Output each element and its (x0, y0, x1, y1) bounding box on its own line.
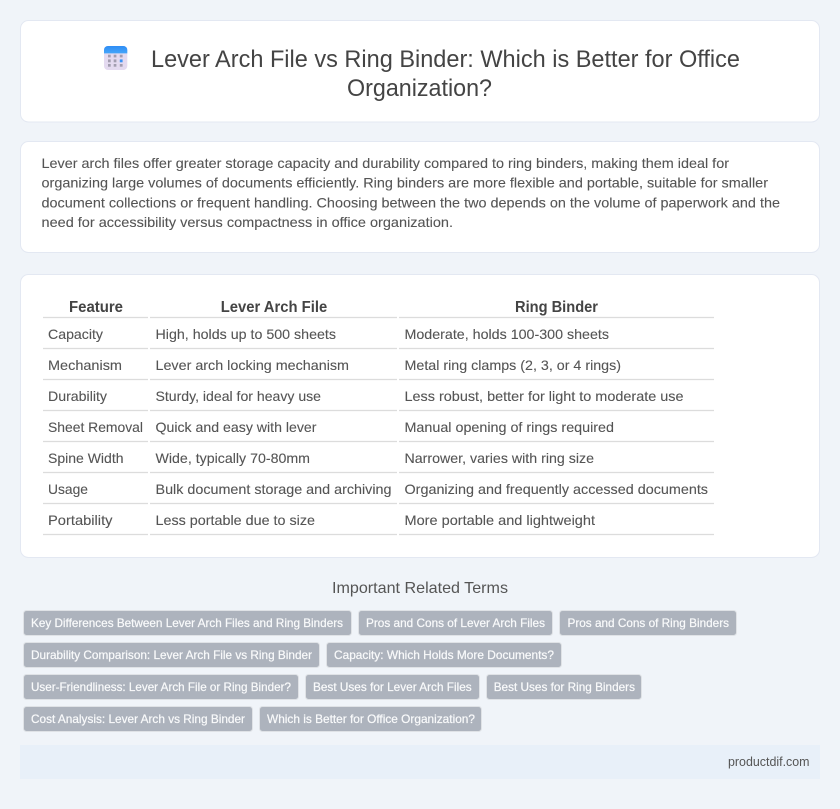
panel: title header (20, 20, 820, 122)
table row: capacity: Moderate, holds 100-300 sheets (404, 326, 609, 342)
table row: mechanism (43, 357, 714, 380)
title: Lever Arch File vs Ring Binder: Which is Better for Office (151, 46, 740, 73)
table row: capacity: High, holds up to 500 sheets (156, 326, 336, 342)
footer bar (20, 745, 820, 779)
tag: Pros and Cons of Lever Arch Files (366, 616, 545, 630)
tag: Pros and Cons of Ring Binders (568, 616, 729, 630)
table header row (43, 299, 714, 318)
table row: usage (43, 481, 714, 504)
tag (24, 706, 252, 732)
table row: sheet removal: Quick and easy with lever (156, 419, 317, 435)
table row: durability: Less robust, better for light to moderate use (404, 388, 684, 404)
table row: capacity (43, 326, 714, 348)
table row: portability (43, 512, 714, 534)
tag (24, 610, 352, 636)
text block: summary: document collections or frequent handling. Choosing between the two depends on the volume of paperwork and the (42, 194, 780, 210)
table row: sheet removal: Sheet Removal (48, 419, 143, 435)
table row: spine width (43, 450, 714, 472)
tag: Best Uses for Ring Binders (494, 680, 635, 694)
table header row: Ring Binder (515, 299, 598, 316)
tag (306, 674, 480, 700)
table row: usage: Organizing and frequently accessed documents (404, 481, 708, 497)
table row: portability: More portable and lightweight (404, 512, 595, 528)
tag: Best Uses for Lever Arch Files (313, 680, 472, 694)
table row: sheet removal: Manual opening of rings required (404, 419, 614, 435)
table row: mechanism: Lever arch locking mechanism (156, 357, 349, 373)
tag: Which is Better for Office Organization? (267, 712, 475, 726)
table row: spine width: Spine Width (48, 450, 124, 466)
text block: summary: Lever arch files offer greater storage capacity and durability compared to ring binders, making them ideal for (42, 155, 729, 171)
table row: usage: Usage (48, 481, 88, 497)
icon: calendar binder (104, 46, 127, 70)
table header row: Lever Arch File (221, 299, 327, 316)
tag (358, 610, 552, 636)
related term tags (24, 610, 736, 732)
table row: portability: Less portable due to size (156, 512, 315, 528)
table row: durability: Sturdy, ideal for heavy use (156, 388, 321, 404)
table row: usage: Bulk document storage and archiving (156, 481, 392, 497)
title (151, 46, 740, 102)
table row: durability: Durability (48, 388, 107, 404)
tag (24, 642, 320, 668)
panel: comparison table (20, 274, 820, 558)
text block: summary: need for accessibility versus compactness in office organization. (42, 214, 453, 230)
table header row: Feature (69, 299, 123, 316)
table row: spine width: Narrower, varies with ring size (404, 450, 594, 466)
title: Organization? (347, 75, 492, 102)
tag (560, 610, 736, 636)
text block: summary: organizing large volumes of documents efficiently. Ring binders are more flexible and portable, suitable for smaller (42, 175, 768, 191)
tag: Durability Comparison: Lever Arch File vs Ring Binder (31, 648, 312, 662)
table row: mechanism: Metal ring clamps (2, 3, or 4 rings) (404, 357, 621, 373)
table row: mechanism: Mechanism (48, 357, 122, 373)
table row: durability (43, 388, 714, 410)
table row: portability: Portability (48, 512, 112, 528)
table row: capacity: Capacity (48, 326, 103, 342)
tag (326, 642, 562, 668)
tag (486, 674, 642, 700)
footer bar: productdif.com (728, 754, 810, 769)
tag: Capacity: Which Holds More Documents? (334, 648, 554, 662)
tag: Key Differences Between Lever Arch Files and Ring Binders (31, 616, 343, 630)
panel: intro paragraph (20, 142, 820, 252)
tag (260, 706, 482, 732)
text block: summary (42, 155, 780, 230)
tag: User-Friendliness: Lever Arch File or Ring Binder? (31, 680, 291, 694)
heading: related terms: Important Related Terms (332, 580, 508, 597)
tag: Cost Analysis: Lever Arch vs Ring Binder (31, 712, 245, 726)
tag (24, 674, 298, 700)
table row: sheet removal (43, 419, 714, 442)
table row: spine width: Wide, typically 70-80mm (156, 450, 310, 466)
